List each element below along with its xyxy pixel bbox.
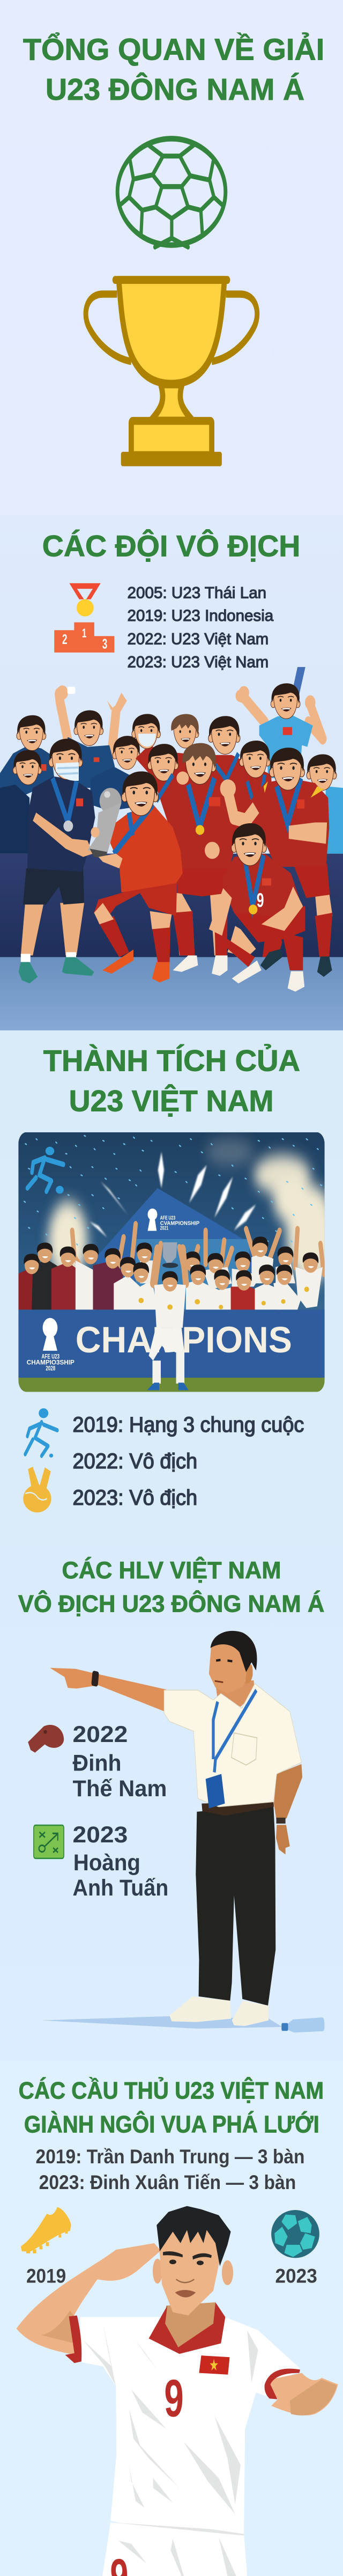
grass — [18, 1378, 325, 1392]
heading — [43, 1043, 300, 1118]
roof logo: CVAMPIONSHIP — [160, 1220, 199, 1226]
coach 2022: Đinh — [73, 1750, 122, 1776]
shirt — [164, 1684, 301, 1807]
forearm shadow — [42, 2310, 75, 2344]
player center — [166, 743, 235, 976]
icon: medal and podium: 3 — [102, 636, 107, 652]
shirt — [80, 2317, 300, 2534]
palm — [290, 2380, 337, 2416]
right cuff — [265, 2369, 300, 2399]
banner logo: AFE U23 — [42, 1353, 59, 1360]
confetti — [24, 1136, 322, 1245]
stage roof — [96, 1188, 252, 1287]
trophy silver — [87, 788, 123, 868]
crouching player number 9 — [209, 823, 305, 992]
fireworks — [90, 1152, 256, 1238]
central player — [147, 1249, 189, 1390]
man with mask and shorts — [19, 739, 95, 983]
flag patch: ★ — [210, 2358, 218, 2373]
left sleeve cuff — [65, 2315, 81, 2363]
photo: champions ceremony — [18, 1132, 334, 1392]
list of champions — [128, 584, 274, 671]
panel: overview — [0, 0, 343, 515]
smoke clouds — [48, 1139, 334, 1283]
coach 2022 — [73, 1721, 167, 1802]
staff in blue shirt — [238, 683, 323, 778]
raised arms — [72, 1224, 324, 1283]
player with cape and trophy — [94, 771, 183, 983]
list of champions: 2005: U23 Thái Lan — [128, 584, 266, 602]
coach 2023: Anh Tuấn — [73, 1875, 168, 1900]
heading: THÀNH TÍCH CỦA — [43, 1043, 300, 1078]
flag patch — [199, 2355, 230, 2375]
trophy cup — [162, 1242, 178, 1268]
pants — [196, 1805, 275, 2006]
label 2019: 2019 — [26, 2265, 66, 2287]
panel background — [0, 2061, 343, 2576]
staff in navy — [0, 685, 153, 854]
icon: medal and podium: 2 — [62, 631, 68, 647]
panel background — [0, 1030, 343, 1546]
heading: CÁC ĐỘI VÔ ĐỊCH — [42, 529, 300, 563]
icon: runner in photo — [27, 1147, 64, 1194]
pocket — [232, 1733, 257, 1765]
crowd shirts — [18, 1254, 323, 1309]
flag pole — [293, 667, 305, 694]
icon: football — [117, 138, 226, 247]
panel: top scorers — [0, 2061, 343, 2576]
icon: medal and podium: 1 — [82, 627, 86, 641]
heading: CÁC CẦU THỦ U23 VIỆT NAM — [19, 2076, 324, 2104]
illustration: stage backdrop — [0, 854, 343, 1030]
panel background — [0, 515, 343, 1030]
back row in red — [132, 714, 273, 844]
list of champions: 2019: U23 Indonesia — [128, 607, 274, 625]
roof logo: 2021 — [160, 1225, 168, 1231]
shirt folds — [83, 2324, 258, 2576]
heading: VÔ ĐỊCH U23 ĐÔNG NAM Á — [18, 1589, 324, 1618]
heading — [18, 1556, 324, 1618]
banner logo — [27, 1318, 74, 1372]
coach 2023 — [73, 1821, 168, 1900]
watch — [277, 1818, 286, 1824]
list of achievements: 2022: Vô địch — [73, 1450, 197, 1474]
back arm and hand — [274, 1764, 302, 1855]
pointing arm — [50, 1668, 169, 1713]
panel background — [0, 0, 343, 515]
list of achievements — [73, 1413, 304, 1510]
list of achievements: 2019: Hạng 3 chung cuộc — [73, 1413, 304, 1437]
head — [153, 2206, 233, 2315]
icon: trophy — [86, 276, 257, 466]
belt — [202, 1801, 274, 1816]
coach 2022: 2022 — [73, 1721, 128, 1747]
panel: Vietnam achievements — [18, 1044, 325, 1512]
shoes — [169, 1996, 231, 2022]
illustration: saluting player — [17, 2206, 338, 2576]
banner — [18, 1309, 325, 1378]
left arm saluting — [17, 2243, 161, 2355]
heading: CÁC HLV VIỆT NAM — [62, 1556, 281, 1584]
coach 2023: Hoàng — [73, 1849, 140, 1875]
right arm — [270, 2373, 338, 2416]
banner text: CHAMPIONS — [76, 1320, 292, 1360]
panel background — [0, 1546, 343, 2061]
scorers list: 2019: Trần Danh Trung — 3 bàn — [36, 2146, 305, 2168]
icon: medal and podium — [54, 583, 114, 653]
icon: runner — [25, 1408, 57, 1458]
icon: tactics board — [34, 1825, 64, 1858]
shorts — [102, 2522, 247, 2576]
scorers list: 2023: Đinh Xuân Tiến — 3 bàn — [39, 2171, 296, 2193]
list of champions: 2022: U23 Việt Nam — [128, 631, 269, 648]
staff right in light blue — [307, 754, 343, 854]
heading: GIÀNH NGÔI VUA PHÁ LƯỚI — [24, 2110, 319, 2138]
list of achievements: 2023: Vô địch — [73, 1486, 197, 1510]
illustration: team celebrating — [0, 667, 343, 992]
icon: teal ball — [271, 2210, 319, 2258]
lanyard and badge — [206, 1690, 256, 1809]
heading: U23 VIỆT NAM — [69, 1084, 274, 1118]
panel: champions — [0, 515, 343, 1030]
ground shadow — [42, 2016, 282, 2029]
neck — [164, 2302, 215, 2348]
label 2023: 2023 — [275, 2265, 317, 2287]
icon: victory hand — [23, 1467, 51, 1512]
title: U23 ĐÔNG NAM Á — [46, 72, 304, 107]
crowd heads — [24, 1236, 318, 1291]
sky — [18, 1132, 325, 1392]
heading — [19, 2076, 324, 2138]
scorers list — [36, 2146, 305, 2193]
head — [209, 1631, 257, 1694]
icon: golden boot — [21, 2207, 71, 2253]
medals — [138, 1287, 309, 1309]
title: TỔNG QUAN VỀ GIẢI — [23, 32, 324, 67]
illustration: coach pointing — [42, 1631, 324, 2032]
water bottle — [281, 2017, 324, 2032]
panel: coaches — [0, 1546, 343, 2061]
list of champions: 2023: U23 Việt Nam — [128, 654, 269, 671]
roof logo — [148, 1209, 199, 1231]
wristband — [91, 1671, 99, 1687]
title — [23, 32, 324, 107]
jersey number: 9 — [164, 2369, 184, 2428]
banner logo: CHAMPIO3SHIP — [27, 1359, 74, 1366]
banner logo: 2028 — [46, 1365, 56, 1372]
neck — [215, 1680, 255, 1707]
red collar — [149, 2302, 225, 2354]
icon: whistle — [28, 1725, 64, 1753]
coach 2022: Thế Nam — [73, 1775, 167, 1802]
coach 2023: 2023 — [73, 1821, 128, 1847]
roof logo: AFE U23 — [160, 1214, 175, 1221]
player right — [220, 748, 332, 977]
crouching player number 9: 9 — [257, 889, 264, 911]
